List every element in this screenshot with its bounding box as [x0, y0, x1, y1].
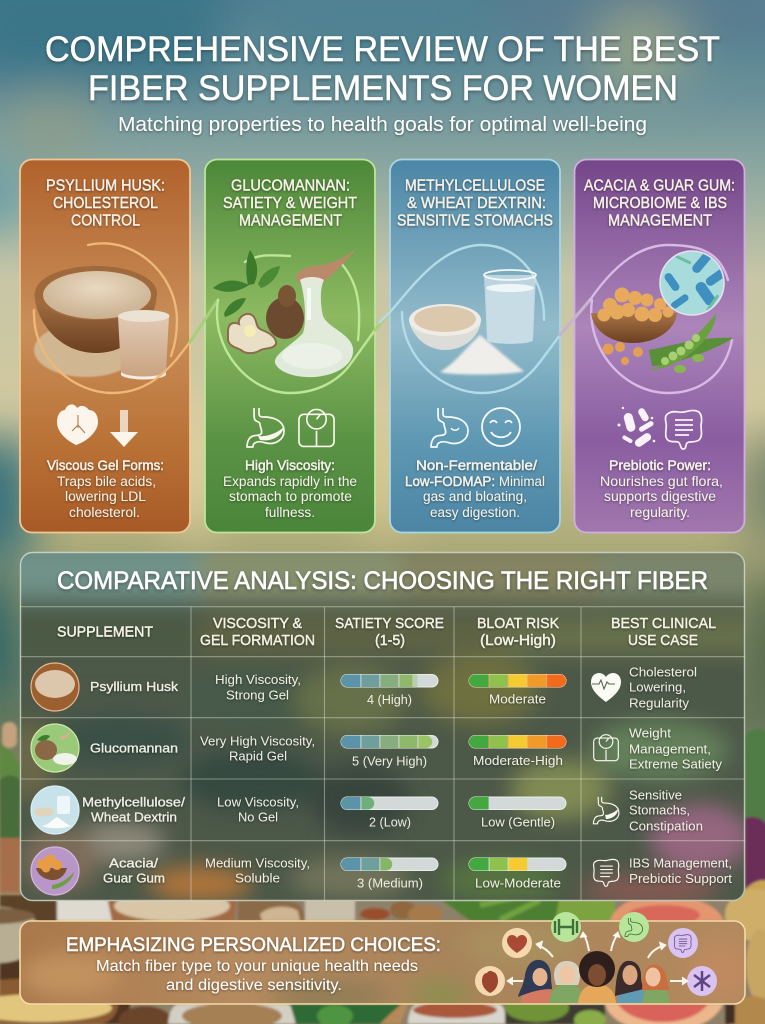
panel text: viscous gel: Traps bile acids, [57, 474, 156, 489]
panel heading: psyllium: PSYLLIUM HUSK: [46, 178, 165, 194]
row text: acacia: Acacia/ [109, 856, 158, 870]
row text: psyllium: Psyllium Husk [90, 679, 179, 694]
row text: psyllium: High Viscosity, [215, 672, 301, 687]
use case text: Weight [629, 726, 671, 740]
panel heading: psyllium [46, 178, 165, 230]
row text: glucomannan: Very High Viscosity, [200, 734, 315, 748]
table header row: (1-5) [375, 633, 405, 649]
satiety label: 5 (Very High) [352, 754, 427, 768]
icon: weighing scale [299, 409, 334, 446]
panel heading: methylcellulose: SENSITIVE STOMACHS [397, 212, 553, 230]
panel text: non-fermentable: Non-Fermentable/ [416, 458, 537, 473]
satiety bar: 3 medium [341, 858, 438, 870]
icon: scale [594, 735, 618, 761]
row text: acacia: Soluble [235, 870, 280, 886]
row: psyllium husk [31, 663, 697, 711]
icon: happy stomach [431, 408, 468, 447]
banner text: Match fiber type to your unique health needs [96, 958, 418, 975]
panel text: prebiotic: Nourishes gut flora, [600, 474, 723, 489]
bloat label: Low (Gentle) [481, 814, 555, 830]
row: methylcellulose [31, 786, 703, 834]
table header row: BEST CLINICAL [611, 616, 716, 632]
panel heading: acacia: ACACIA & GUAR GUM: [584, 178, 735, 194]
use case text: Constipation [629, 818, 703, 834]
use case text [629, 788, 703, 834]
use case text [629, 856, 732, 886]
row text: glucomannan: Glucomannan [90, 740, 178, 756]
side greens [0, 722, 765, 922]
panel text: high viscosity: fullness. [265, 505, 315, 520]
connecting ribbon lines [34, 243, 732, 393]
table header row: SUPPLEMENT [57, 624, 153, 640]
panel heading: acacia: MICROBIOME & IBS [593, 195, 727, 212]
use case text: Regularity [629, 696, 690, 710]
panel text: prebiotic: regularity. [630, 505, 690, 520]
row text: psyllium [90, 672, 301, 702]
panel heading: glucomannan: MANAGEMENT [239, 212, 342, 230]
use case text [629, 664, 697, 710]
panel: glucomannan [205, 160, 375, 532]
bloat label: Moderate-High [473, 753, 563, 768]
panel text: prebiotic [600, 458, 723, 520]
panel heading: methylcellulose: & WHEAT DEXTRIN: [407, 195, 546, 212]
bloat bar: moderate [469, 674, 566, 687]
icon: intestine bubble [668, 928, 698, 958]
icon: intestine [594, 859, 619, 886]
table header row [57, 616, 716, 649]
use case text: IBS Management, [629, 856, 732, 870]
icon: stomach [593, 797, 619, 824]
satiety bar: 2 low [341, 797, 438, 810]
row: glucomannan [31, 724, 722, 772]
illustration: group of five women [518, 951, 670, 1003]
row text: glucomannan [90, 734, 315, 764]
table header row: BLOAT RISK [477, 616, 559, 632]
row text: methylcellulose [82, 794, 299, 824]
row: acacia and guar gum [31, 847, 732, 895]
icon: smiley [482, 408, 520, 446]
title [45, 30, 720, 108]
use case text: Prebiotic Support [629, 871, 732, 886]
title: COMPREHENSIVE REVIEW OF THE BEST [45, 30, 720, 69]
panel text: prebiotic: supports digestive [604, 489, 716, 504]
bloat bar: low-moderate [469, 858, 566, 870]
top row [57, 895, 112, 921]
illustration: acacia gum, peas and microbes [591, 251, 733, 373]
panel: psyllium husk [20, 160, 190, 532]
satiety bar: 4 high [341, 674, 438, 687]
bloat bar: low [469, 797, 566, 810]
thumbnail: glucomannan [31, 724, 79, 772]
panel text: non-fermentable: easy digestion. [430, 505, 520, 520]
use case text: Extreme Satiety [629, 756, 722, 772]
icon: stomach [247, 408, 284, 447]
panel: acacia and guar gum [574, 160, 744, 532]
icon: intestine [665, 410, 702, 449]
table header row: VISCOSITY & [213, 616, 302, 632]
row text: methylcellulose: No Gel [238, 810, 278, 824]
bloat label: Low-Moderate [475, 876, 561, 890]
bloat bar: moderate-high [469, 736, 566, 748]
icon: microbe bubble [687, 966, 717, 996]
panel heading: glucomannan [223, 178, 357, 230]
row text: methylcellulose: Methylcellulose/ [82, 794, 185, 810]
table header row: (Low-High) [480, 633, 556, 649]
banner text: and digestive sensitivity. [166, 977, 342, 994]
icon: heart [57, 404, 98, 445]
panel heading: psyllium: CONTROL [71, 212, 140, 230]
panel text: viscous gel: cholesterol. [69, 505, 140, 520]
icon: down arrow [110, 410, 138, 447]
illustration: white powders and water glass [409, 270, 536, 375]
banner text [96, 958, 418, 994]
panel heading: methylcellulose: METHYLCELLULOSE [405, 178, 545, 194]
panel text: high viscosity: stomach to promote [229, 489, 352, 504]
table header row: USE CASE [628, 633, 698, 649]
illustration: bowl of psyllium husk and glass [34, 266, 170, 380]
use case text: Cholesterol [629, 664, 697, 680]
panel heading: psyllium: CHOLESTEROL [53, 195, 158, 212]
panel heading: glucomannan: SATIETY & WEIGHT [223, 195, 357, 212]
comparison table panel [0, 540, 765, 906]
use case text: Lowering, [629, 680, 686, 694]
panel text: non-fermentable: gas and bloating, [423, 489, 527, 504]
bloat label: Moderate [489, 692, 546, 706]
bottom row [0, 979, 118, 1024]
icon: dumbbell bubble [551, 912, 581, 942]
panel text: high viscosity: Expands rapidly in the [223, 474, 357, 489]
row text: glucomannan: Rapid Gel [229, 748, 287, 764]
panel text: high viscosity: High Viscosity: [245, 458, 335, 473]
illustration: konjac root, leaves and gel spoon [213, 247, 358, 377]
row text: acacia: Medium Viscosity, [205, 856, 310, 870]
banner heading: EMPHASIZING PERSONALIZED CHOICES: [66, 935, 441, 956]
use case text: Management, [629, 742, 711, 756]
satiety label: 3 (Medium) [357, 876, 423, 890]
table heading: COMPARATIVE ANALYSIS: CHOOSING THE RIGHT FIBER [57, 567, 708, 595]
row text: acacia [103, 856, 310, 886]
icon: anatomical heart bubble [475, 966, 505, 996]
panel text: non-fermentable [405, 458, 545, 520]
satiety bar: 5 very high [341, 736, 438, 748]
title: FIBER SUPPLEMENTS FOR WOMEN [88, 69, 678, 108]
use case text: Stomachs, [629, 802, 690, 818]
row text: acacia: Guar Gum [103, 870, 165, 886]
icon: heart pulse [591, 673, 621, 702]
row text: methylcellulose: Wheat Dextrin [91, 810, 177, 824]
panel heading: acacia: MANAGEMENT [608, 212, 712, 230]
subtitle: Matching properties to health goals for optimal well-being [118, 114, 647, 136]
icon: stomach bubble [619, 912, 649, 942]
banner: personalized choices [20, 912, 750, 1009]
icon: heart rate bubble [502, 928, 532, 958]
row text: methylcellulose: Low Viscosity, [217, 794, 299, 810]
table header row: GEL FORMATION [200, 633, 315, 649]
arrows to icons [507, 932, 688, 985]
bottom food [0, 889, 765, 1024]
panel text: prebiotic: Prebiotic Power: [609, 458, 711, 473]
panel text: high viscosity [223, 458, 357, 520]
panel heading: methylcellulose [397, 178, 553, 230]
thumbnail: acacia [31, 847, 79, 895]
use case text [629, 726, 722, 772]
panel text: viscous gel: lowering LDL [65, 489, 147, 504]
satiety label: 4 (High) [367, 692, 412, 707]
panel text: viscous gel: Viscous Gel Forms: [47, 458, 164, 473]
panel heading: glucomannan: GLUCOMANNAN: [231, 178, 350, 194]
panel: methylcellulose and wheat dextrin [390, 160, 560, 532]
panel heading: acacia [584, 178, 735, 230]
satiety label: 2 (Low) [369, 814, 411, 830]
panel text: non-fermentable: Low-FODMAP: Minimal [405, 474, 545, 489]
use case text: Sensitive [629, 788, 682, 802]
row text: psyllium: Strong Gel [226, 688, 289, 702]
icon: gut bacteria [618, 407, 655, 448]
panel text: viscous gel [47, 458, 164, 520]
thumbnail: psyllium [31, 663, 79, 711]
thumbnail: methylcellulose [31, 786, 79, 834]
table header row: SATIETY SCORE [335, 616, 444, 632]
